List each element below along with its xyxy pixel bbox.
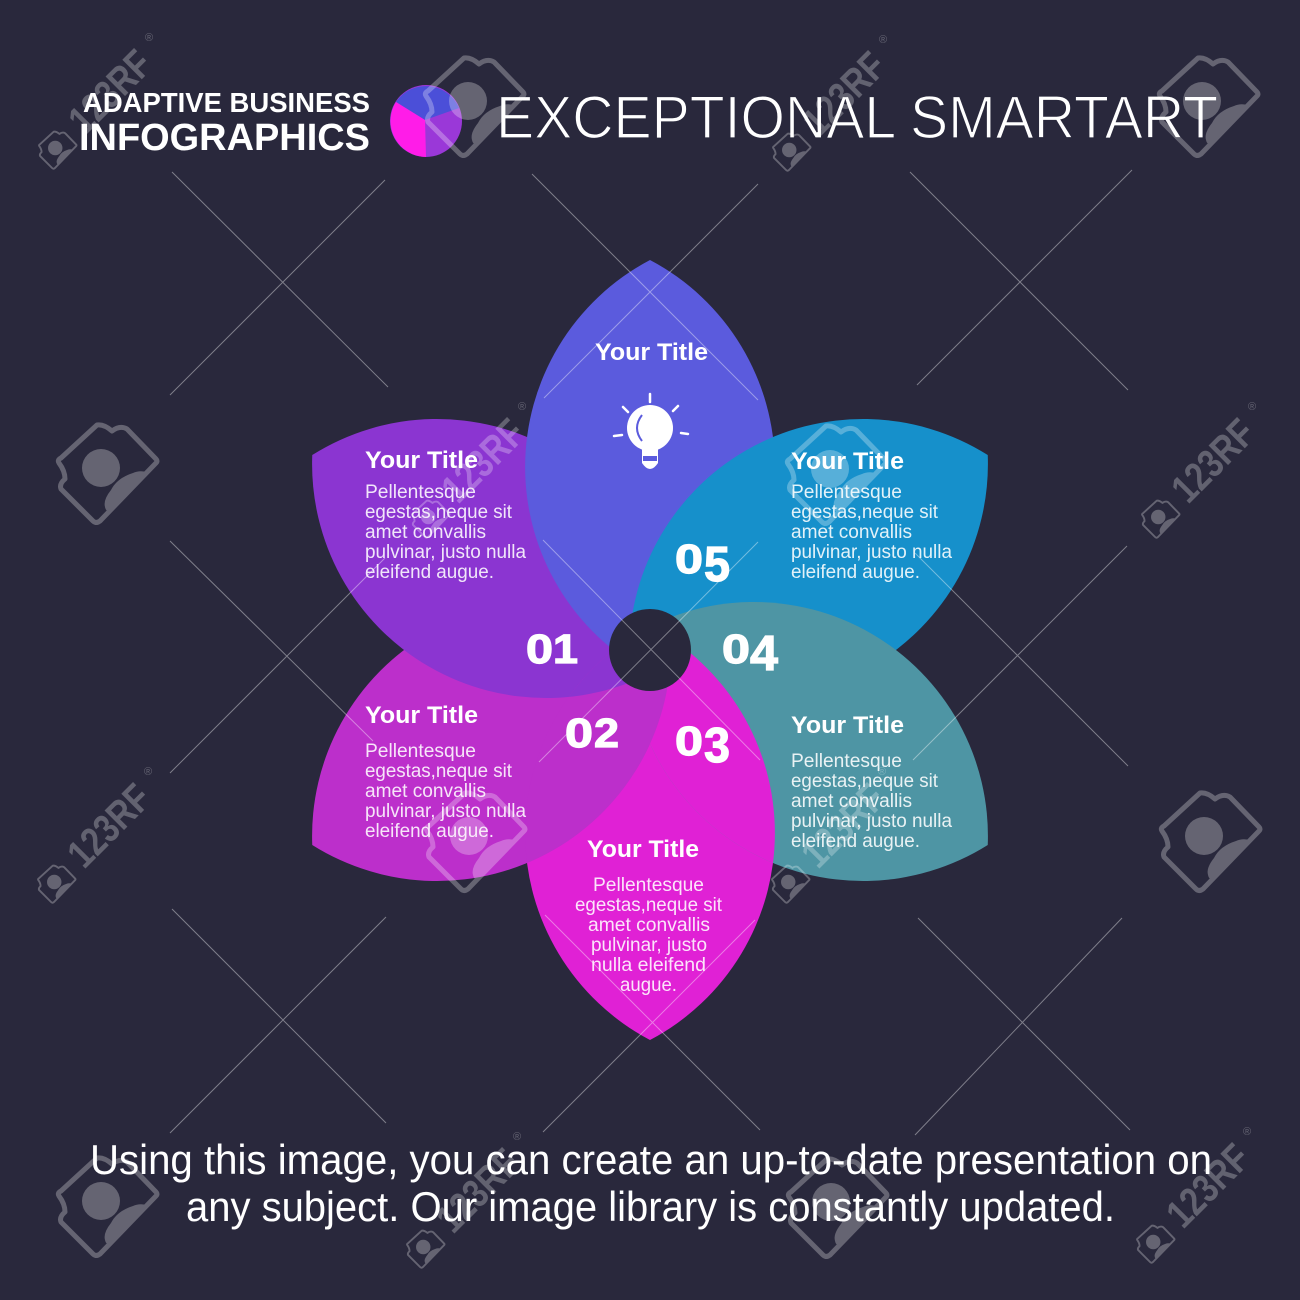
header: brand text: ADAPTIVE BUSINESS: [83, 87, 370, 118]
watermark 123RF: [1142, 401, 1264, 538]
watermark 123RF: ®: [145, 32, 153, 44]
text block 01: Pellentesque: [365, 482, 476, 503]
watermark 123RF: 123RF: [433, 411, 534, 511]
petal 04 teal: [567, 530, 1050, 953]
icon: light bulb: [614, 394, 688, 469]
number 02: 0: [565, 710, 593, 756]
text block 01: pulvinar, justo nulla: [365, 542, 526, 563]
watermark 123RF: 123RF: [1158, 1136, 1259, 1236]
text block 03: egestas,neque sit: [575, 895, 723, 916]
text block 05: Your Title: [791, 448, 904, 475]
watermark 123RF: 123RF: [59, 776, 160, 876]
watermark cross lines: [170, 170, 1132, 1135]
number 04: 4: [750, 627, 778, 681]
text block 03: nulla eleifend: [591, 955, 706, 976]
text block 05: [791, 448, 952, 583]
watermark 123RF: ®: [513, 1131, 521, 1143]
text block 04: amet convallis: [791, 791, 912, 812]
text block 04: [791, 712, 952, 852]
watermark 123RF: ®: [1248, 401, 1256, 413]
petal 02 and 01 overlap over 03: [528, 654, 668, 862]
text block 03: Your Title: [587, 836, 699, 863]
text block 05: amet convallis: [791, 522, 912, 543]
text block 03: pulvinar, justo: [591, 935, 707, 956]
text block 05: egestas,neque sit: [791, 502, 939, 523]
petal 03 magenta: [525, 626, 775, 1040]
petal 02 pink purple: [250, 530, 733, 953]
text block 01: [365, 447, 526, 583]
text block 03: [575, 836, 723, 996]
watermark 123RF: [412, 401, 534, 538]
watermark 123RF: ®: [1243, 1126, 1251, 1138]
watermark 123RF: 123RF: [793, 776, 894, 876]
watermark 123RF: [38, 766, 160, 903]
text block 02: amet convallis: [365, 781, 486, 802]
text block 04: egestas,neque sit: [791, 771, 939, 792]
title: EXCEPTIONAL SMARTART: [496, 84, 1218, 151]
number 02: 2: [594, 710, 619, 756]
icon: pie logo: [390, 85, 462, 157]
bottom description text: any subject. Our image library is constantly updated.: [186, 1183, 1115, 1230]
text block 01: eleifend augue.: [365, 562, 494, 583]
text block 02: Your Title: [365, 702, 478, 729]
watermark 123RF: ®: [878, 766, 886, 778]
watermark 123RF: [1137, 1126, 1259, 1263]
watermark 123RF: ®: [144, 766, 152, 778]
header: brand text: INFOGRAPHICS: [79, 117, 370, 159]
text block 01: egestas,neque sit: [365, 502, 513, 523]
text block 02: egestas,neque sit: [365, 761, 513, 782]
text block 05: eleifend augue.: [791, 562, 920, 583]
watermark 123RF: 123RF: [1163, 411, 1264, 511]
watermark egg: [788, 1159, 887, 1256]
watermark 123RF: ®: [518, 401, 526, 413]
text block 02: Pellentesque: [365, 741, 476, 762]
watermark 123RF: 123RF: [60, 42, 161, 142]
text block 01: amet convallis: [365, 522, 486, 543]
flower diagram petals: [312, 260, 988, 1040]
petal top indigo: [525, 260, 775, 674]
text: top petal title: Your Title: [595, 339, 708, 366]
text block 04: pulvinar, justo nulla: [791, 811, 952, 832]
petal 05 blue: [567, 347, 1050, 770]
watermark egg: [787, 426, 886, 524]
number 01: 0: [526, 626, 553, 672]
text block 01: Your Title: [365, 447, 478, 474]
text block 05: Pellentesque: [791, 482, 902, 503]
text block 02: eleifend augue.: [365, 821, 494, 842]
watermark 123RF: [772, 766, 894, 903]
text block 02: [365, 702, 526, 842]
number 03: 3: [704, 719, 730, 773]
text block 04: eleifend augue.: [791, 831, 920, 852]
number 01: 1: [553, 626, 578, 672]
watermark egg: [58, 1158, 157, 1256]
bottom description text: Using this image, you can create an up-to-date presentation on: [90, 1136, 1212, 1183]
watermark egg: [426, 793, 525, 890]
number 03: 0: [675, 718, 703, 764]
watermark egg: [1161, 793, 1260, 890]
text block 04: Pellentesque: [791, 751, 902, 772]
text block 03: Pellentesque: [593, 875, 704, 896]
text block 02: pulvinar, justo nulla: [365, 801, 526, 822]
numbers: [526, 536, 778, 773]
text block 03: augue.: [620, 975, 677, 996]
petal 01 purple: [250, 347, 733, 770]
text block 03: amet convallis: [588, 915, 710, 936]
bottom description text: [90, 1136, 1212, 1230]
watermark 123RF: 123RF: [794, 44, 895, 144]
watermark egg: [425, 58, 524, 156]
header: brand text: [79, 87, 370, 159]
text block 04: Your Title: [791, 712, 904, 739]
number 05: 0: [675, 536, 703, 582]
number 05: 5: [704, 538, 730, 592]
watermark 123RF: ®: [879, 34, 887, 46]
number 04: 0: [722, 626, 750, 672]
watermark 123RF: [407, 1131, 529, 1268]
watermark 123RF: [39, 32, 161, 169]
text block 05: pulvinar, justo nulla: [791, 542, 952, 563]
watermark egg: [58, 425, 157, 522]
petal 03 overlap over teal: [650, 653, 775, 863]
watermark 123RF: 123RF: [428, 1141, 529, 1241]
watermark 123RF: [773, 34, 895, 171]
center hole: [609, 609, 691, 691]
watermark egg: [1159, 58, 1258, 156]
